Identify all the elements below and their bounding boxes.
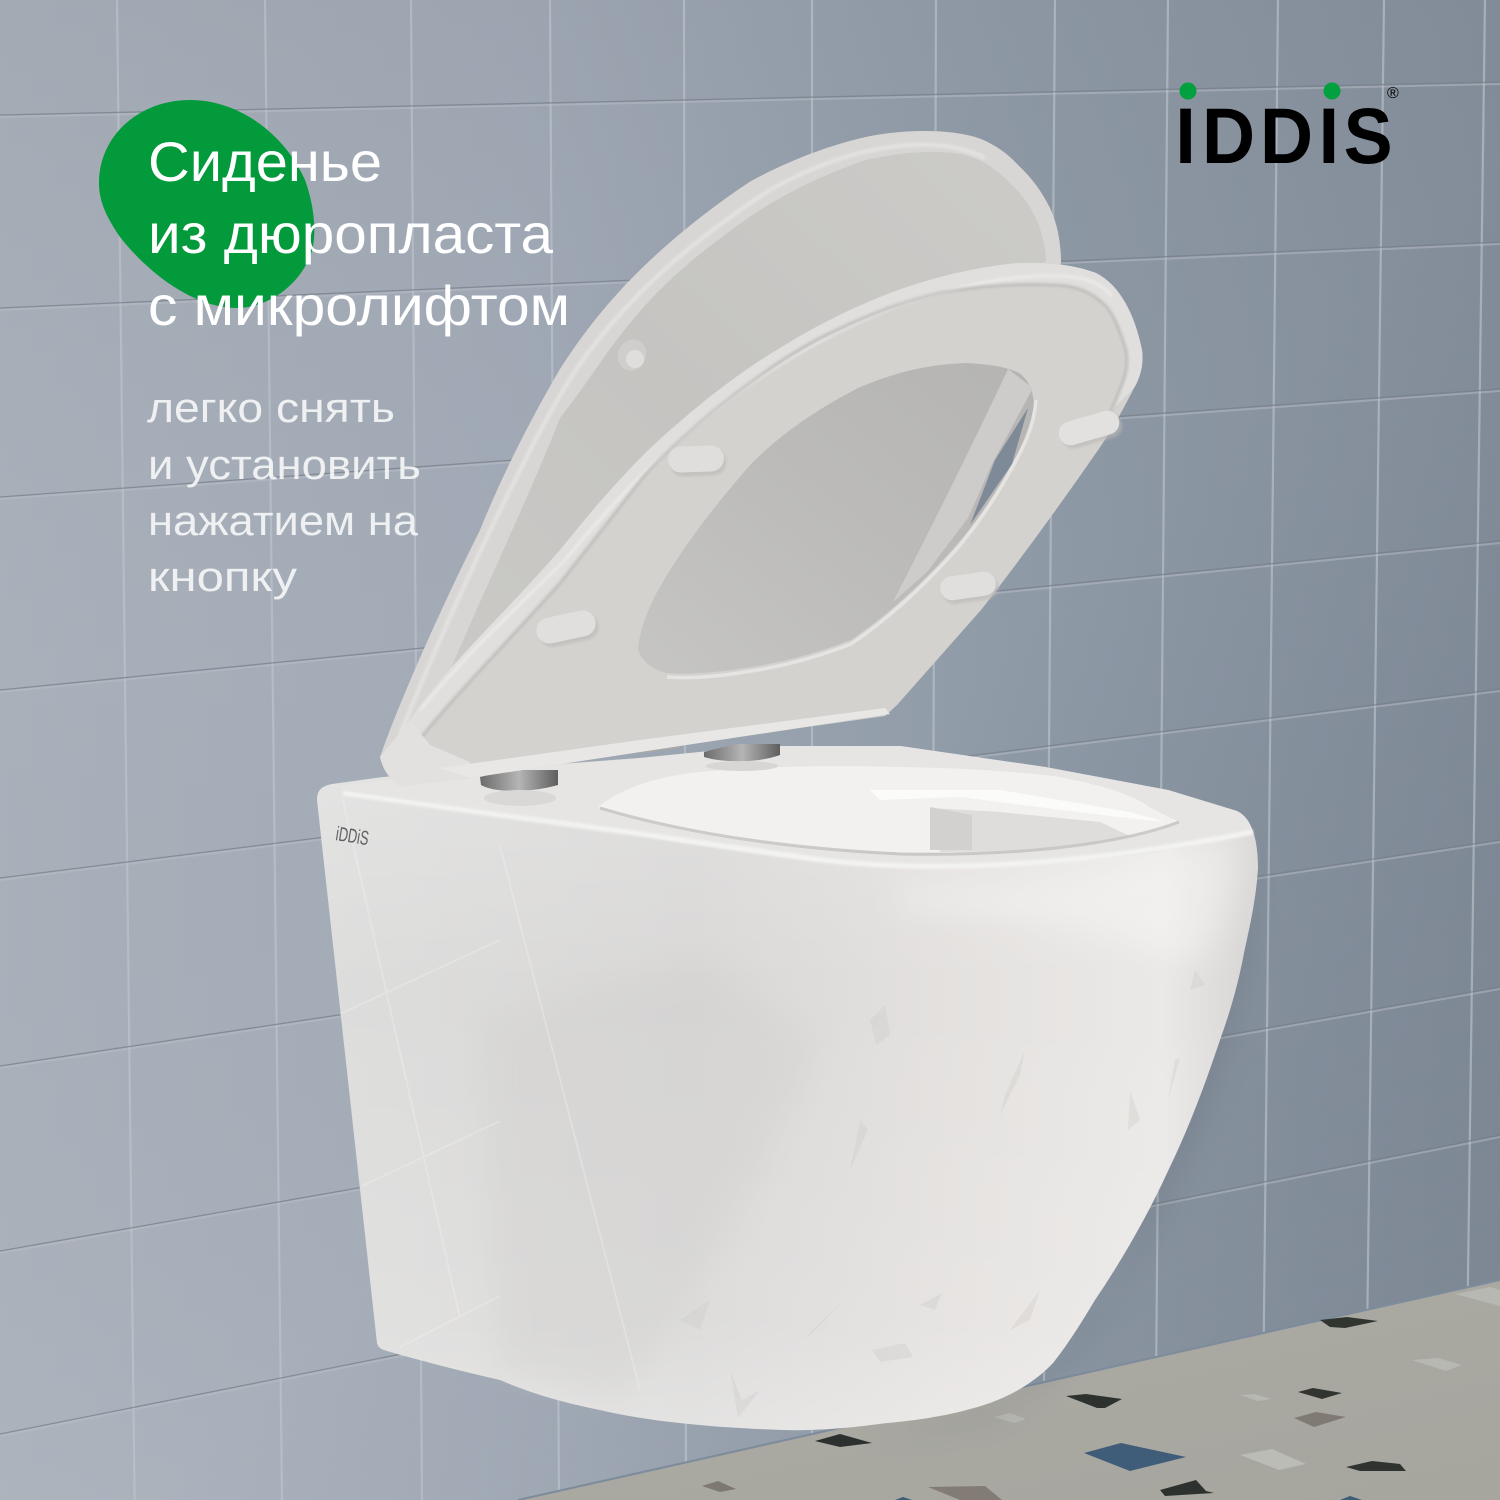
subtitle text: легко снять (147, 384, 395, 431)
heading: Сиденье (148, 130, 382, 193)
bumper bottom-left (534, 608, 601, 649)
toilet lid (380, 131, 1061, 786)
wall-hung toilet bowl (317, 746, 1258, 1430)
seat inner ridge shadow (415, 284, 1127, 745)
lid inner panel (425, 152, 1046, 752)
registered mark: ® (1387, 85, 1399, 102)
lid outer shell (380, 131, 1061, 786)
heading: из дюропласта (148, 202, 554, 265)
brand logo: IDDIS (1175, 93, 1393, 181)
heading: с микролифтом (148, 274, 570, 337)
bowl opening (598, 766, 1179, 853)
release button (640, 738, 680, 753)
glossy rim highlight (870, 790, 1165, 822)
bumper bottom-right (939, 570, 1000, 605)
rim top surface (327, 746, 1253, 868)
bumper top-left (668, 445, 727, 477)
inner hole edge highlight (667, 400, 1036, 678)
wall shadow behind toilet (860, 830, 1252, 1440)
lid band seen through hole (893, 369, 1033, 602)
soft body shading (480, 960, 820, 1400)
chrome hinges (480, 738, 780, 806)
right hinge (704, 744, 780, 771)
seat outer shape (380, 263, 1143, 786)
hole through seat (638, 363, 1034, 674)
bowl inner shading (930, 808, 1130, 852)
flush rim inner detail (930, 807, 972, 850)
subtitle text: нажатием на (148, 497, 419, 544)
floor chips (702, 1287, 1500, 1500)
rim front highlight edge (343, 793, 1253, 866)
small iddis logo on ceramic: iDDiS (334, 823, 370, 850)
subtitle text: кнопку (148, 553, 297, 600)
terrazzo reflections on ceramic (680, 970, 1205, 1418)
left hinge (480, 770, 558, 806)
lid bumper (613, 335, 651, 375)
subtitle text: и установить (148, 441, 421, 488)
green blob accent (99, 100, 314, 308)
seat bumpers (534, 408, 1125, 649)
seat rim highlight (420, 276, 1112, 710)
heading (148, 130, 570, 337)
lid outer highlight (400, 145, 985, 735)
logo green dots (1180, 82, 1340, 100)
seat hinge end (380, 720, 470, 786)
glossy highlight under rim (900, 840, 1237, 960)
reflected wall tile lines (340, 800, 640, 1390)
terrazzo floor (518, 1280, 1500, 1500)
bumper top-right (1056, 408, 1125, 451)
bowl front shadow edge (600, 808, 1179, 854)
subtitle text (147, 384, 421, 600)
hinge bar underside (440, 708, 890, 778)
wall visible through gap (970, 408, 1028, 525)
toilet seat ring (380, 263, 1143, 786)
seat outer rim band (395, 263, 1143, 745)
ceramic body (317, 746, 1258, 1430)
